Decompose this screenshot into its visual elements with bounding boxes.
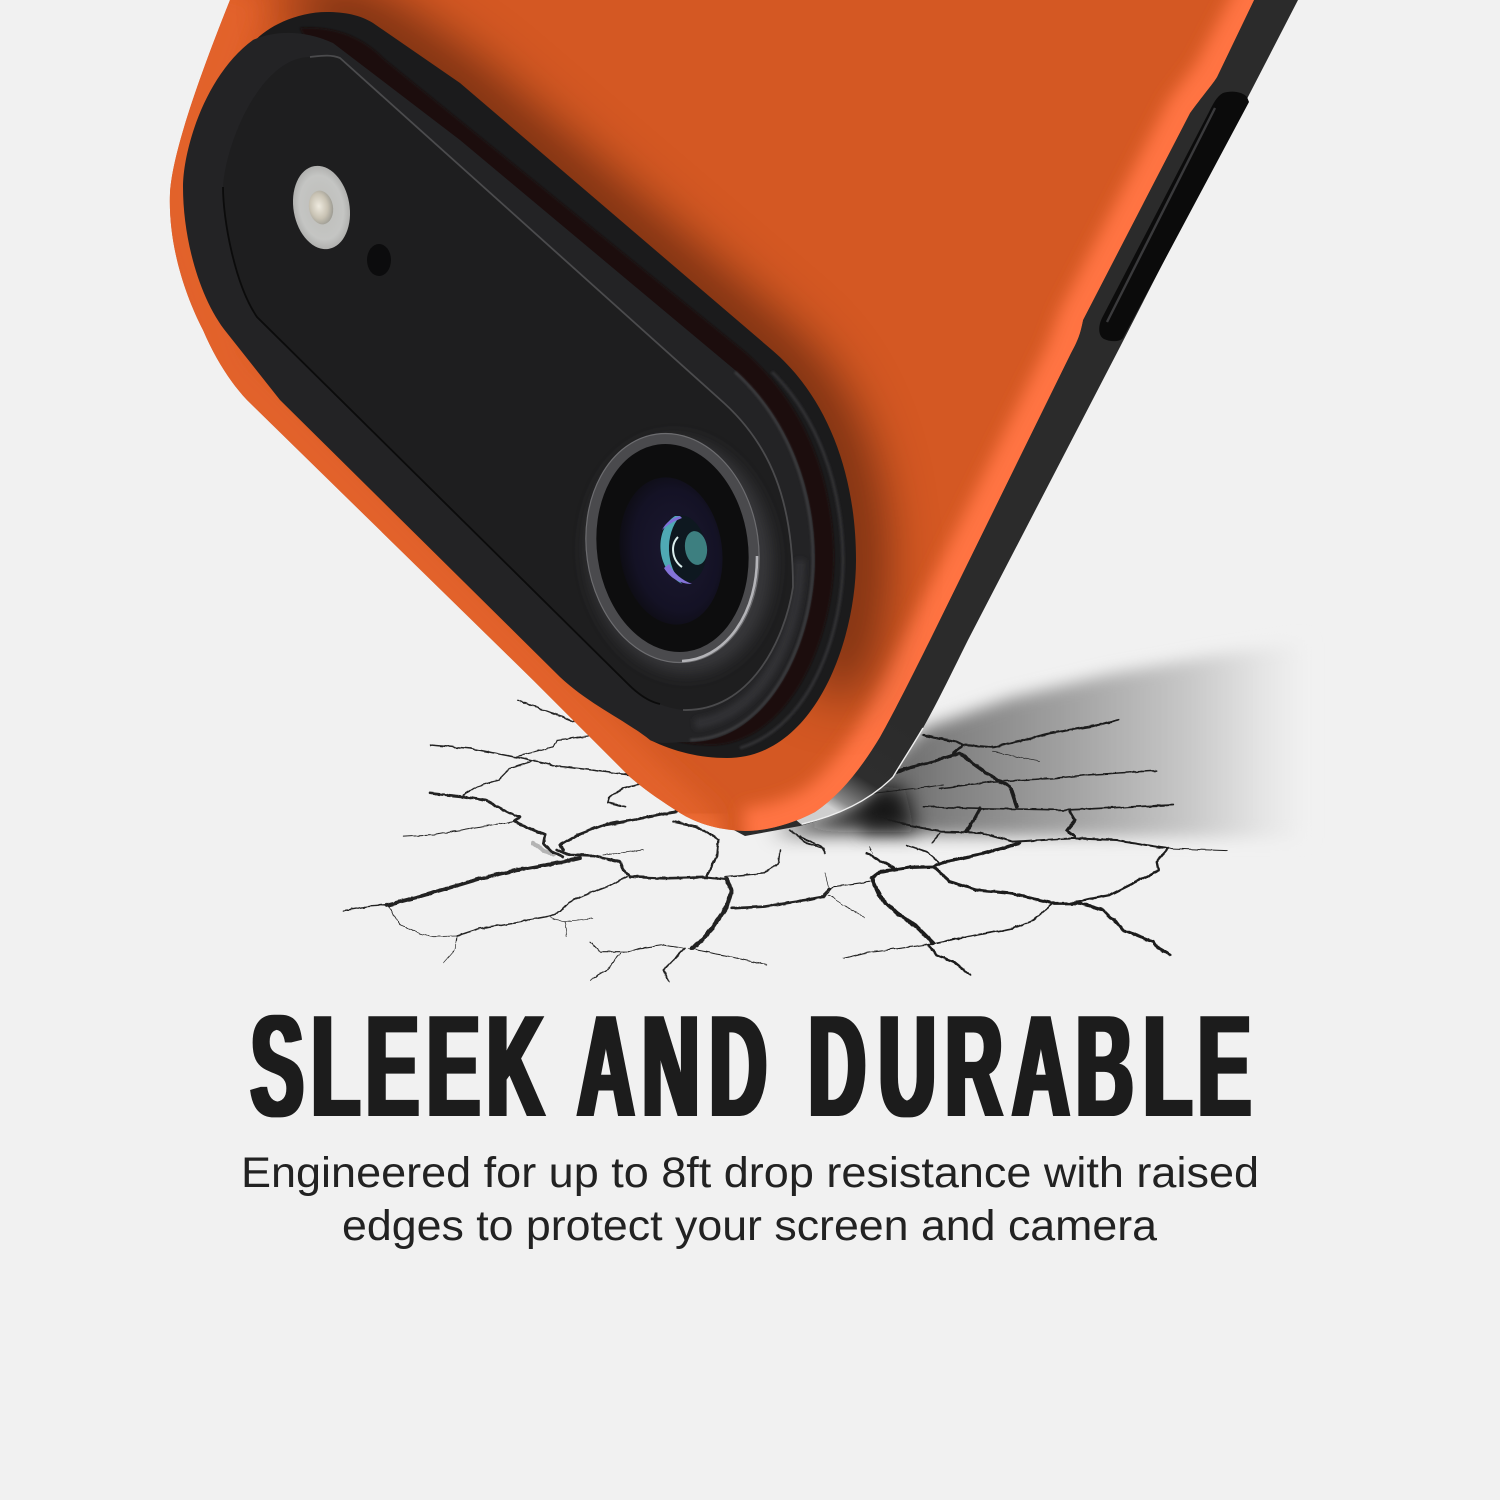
black case side edge [640, 0, 1298, 836]
outer ring [253, 12, 856, 758]
plate lower dark edge [223, 187, 660, 704]
second ring [183, 33, 815, 743]
camera lens [571, 422, 788, 686]
description text [241, 1149, 1259, 1250]
crack: main right network [923, 720, 1118, 747]
outer ridge [740, 372, 843, 748]
description text: edges to protect your screen and camera [342, 1202, 1157, 1250]
camera bump [183, 12, 856, 758]
black plate [223, 56, 793, 710]
phone case [170, 0, 1298, 840]
crack: main thick left branch [387, 858, 580, 905]
description text: Engineered for up to 8ft drop resistance with raised [241, 1149, 1259, 1197]
cracked ground, left half [343, 700, 830, 982]
side button [1099, 92, 1249, 341]
ground shadow [770, 642, 1305, 838]
microphone hole [367, 244, 391, 276]
lens reflection [655, 512, 711, 586]
title: SLEEK AND DURABLE [251, 984, 1251, 1147]
flash [287, 161, 356, 254]
recessed gap [300, 28, 834, 745]
ridge highlight [690, 372, 813, 740]
cracked ground, right half [800, 720, 1227, 975]
orange case back [170, 0, 1268, 840]
pale rim light on case edge [790, 720, 923, 825]
plate edge highlight [310, 56, 793, 710]
